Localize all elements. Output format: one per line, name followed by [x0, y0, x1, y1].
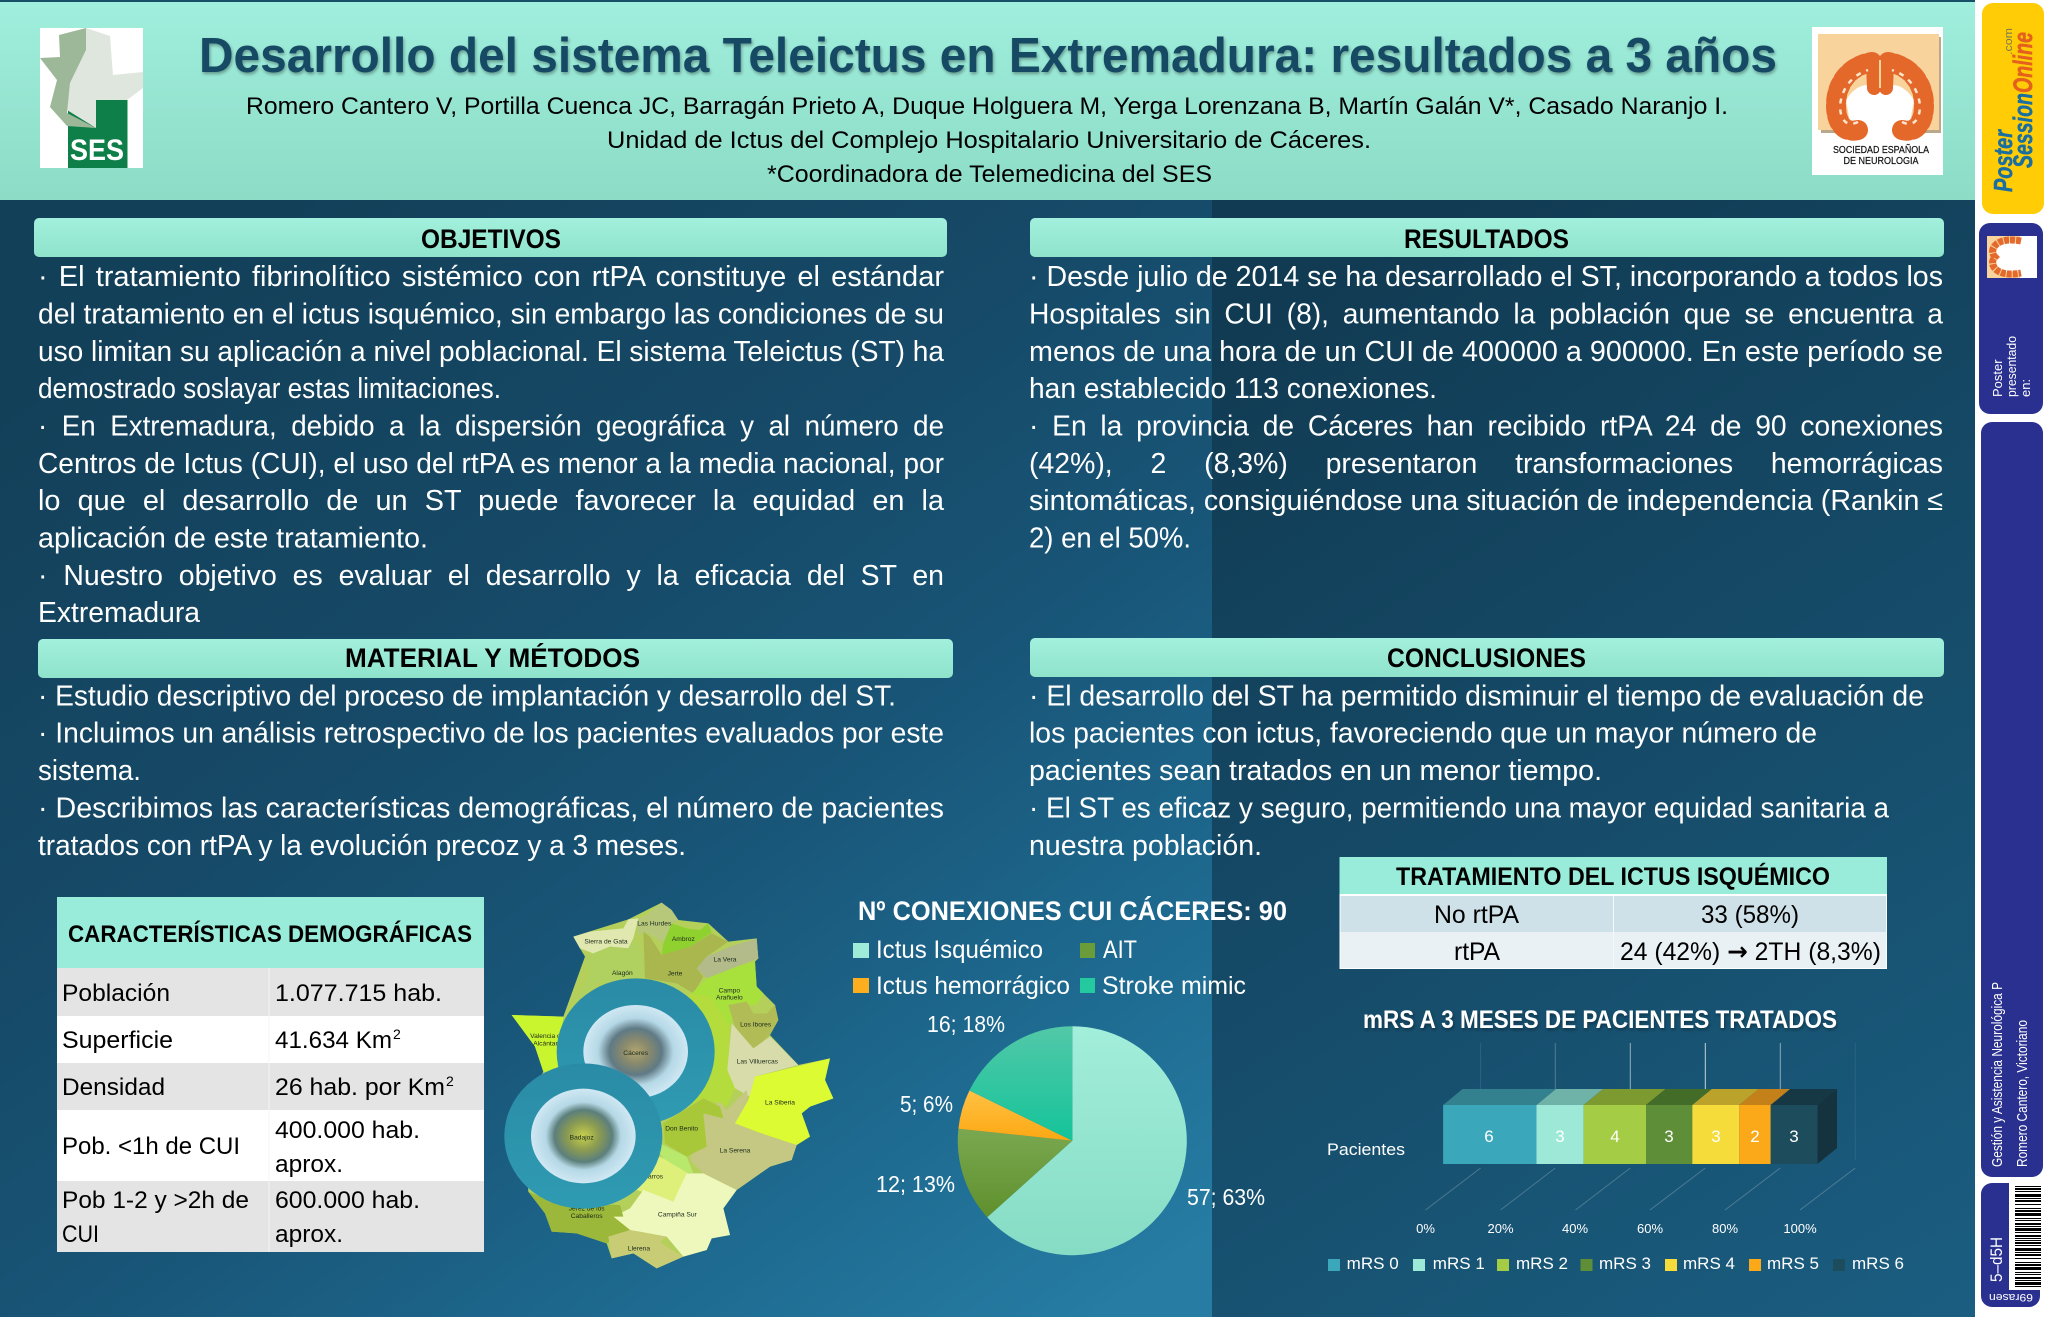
map of Extremadura: Los Ibores — [740, 1022, 772, 1029]
map of Extremadura: Jerez de los — [569, 1206, 605, 1213]
map of Extremadura: Campiña Sur — [658, 1212, 698, 1219]
sidebar: poster presentado en — [1979, 223, 2043, 414]
axis labels: 60% — [1637, 1221, 1663, 1236]
3D stacked bar: 3 — [1555, 1127, 1565, 1146]
chart: mRS a 3 meses — [1327, 1006, 1904, 1273]
map of Extremadura — [504, 903, 833, 1268]
table: características demográficas: aprox. — [275, 1221, 343, 1248]
map of Extremadura: Don Benito — [665, 1126, 698, 1133]
title: Desarrollo del sistema Teleictus en Extremadura: resultados a 3 años — [199, 29, 1777, 83]
text: objetivos: · En Extremadura, debido a la dispersión geográfica y al número de — [38, 410, 944, 442]
text: conclusiones: · El ST es eficaz y seguro, permitiendo una mayor equidad sanitaria a — [1029, 792, 1889, 824]
3D stacked bar: 3 — [1711, 1127, 1721, 1146]
pie chart — [958, 1026, 1187, 1255]
map of Extremadura: Ambroz — [672, 936, 695, 943]
chart title: Nº CONEXIONES CUI CÁCERES: 90 — [858, 895, 1287, 926]
logo: SES — [40, 28, 143, 168]
sidebar: session and author: Romero Cantero, Victoriano — [2014, 1020, 2031, 1167]
sidebar: poster presentado en: presentado — [2004, 336, 2019, 397]
pie labels: 57; 63% — [1187, 1184, 1265, 1210]
map of Extremadura: La Serena — [720, 1147, 751, 1154]
pie labels — [876, 1011, 1265, 1210]
3D stacked bar: 3 — [1664, 1127, 1674, 1146]
text: conclusiones — [1029, 680, 1924, 862]
text: objetivos: · Nuestro objetivo es evaluar el desarrollo y la eficacia del ST en — [38, 560, 944, 592]
bar legend: mRS 5 — [1767, 1254, 1819, 1273]
text: resultados: Hospitales sin CUI (8), aumentando la población que se encuentra a — [1029, 298, 1943, 330]
table: características demográficas: aprox. — [275, 1151, 343, 1178]
map of Extremadura: Valencia de — [530, 1033, 565, 1040]
text: material y metodos: · Estudio descriptivo del proceso de implantación y desarrollo del ST. — [38, 680, 896, 712]
sidebar: session and author: Gestión y Asistencia Neurológica P — [1989, 982, 2006, 1167]
heading: objetivos: OBJETIVOS — [421, 224, 561, 254]
bar legend: mRS 0 — [1347, 1254, 1399, 1273]
axis labels: Pacientes — [1327, 1140, 1405, 1159]
table: tratamiento del ictus isquémico: rtPA — [1454, 938, 1500, 966]
heading: conclusiones — [1030, 638, 1944, 677]
pie legend: Stroke mimic — [1102, 972, 1246, 1000]
text: objetivos: Centros de Ictus (CUI), el uso del rtPA es menor a la media nacional, por — [38, 448, 945, 480]
sidebar: barcode: 5–d5H — [1987, 1237, 2006, 1282]
logo: Sociedad Española de Neurología: SOCIEDAD ESPAÑOLA — [1833, 143, 1929, 156]
sidebar: session and author — [1981, 422, 2043, 1177]
text: objetivos: lo que el desarrollo de un ST puede favorecer la equidad en la — [38, 485, 944, 517]
sidebar: PosterSessionOnline logo: Session — [2008, 93, 2038, 168]
axis labels: 40% — [1562, 1221, 1588, 1236]
text: resultados — [1029, 261, 1943, 554]
heading: objetivos — [34, 218, 947, 257]
heading: conclusiones: CONCLUSIONES — [1387, 643, 1586, 673]
bar legend: mRS 4 — [1683, 1254, 1735, 1273]
map of Extremadura: Llerena — [628, 1246, 650, 1253]
authors and affiliation: *Coordinadora de Telemedicina del SES — [767, 161, 1212, 188]
table: características demográficas: Superficie — [62, 1027, 173, 1054]
table: características demográficas: 26 hab. por Km — [275, 1074, 445, 1101]
text: conclusiones: los pacientes con ictus, favoreciendo que un mayor número de — [1029, 718, 1817, 750]
text: resultados: 2) en el 50%. — [1029, 522, 1191, 554]
pie legend — [853, 936, 1246, 1000]
sidebar: poster presentado en: Poster — [1990, 359, 2005, 397]
3D stacked bar: 3 — [1789, 1127, 1799, 1146]
grid lines — [1426, 1043, 1855, 1210]
sidebar: PosterSessionOnline logo: Online — [2008, 32, 2038, 93]
text: objetivos — [38, 261, 945, 629]
table: características demográficas: CARACTERÍSTICAS DEMOGRÁFICAS — [68, 920, 472, 948]
table: características demográficas: 1.077.715 hab. — [275, 980, 442, 1007]
text: resultados: · En la provincia de Cáceres han recibido rtPA 24 de 90 conexiones — [1029, 410, 1943, 442]
circle: Cáceres — [557, 978, 715, 1125]
text: material y metodos — [38, 680, 944, 862]
map of Extremadura: Sierra de Gata — [584, 938, 628, 945]
table: características demográficas: 2 — [393, 1026, 401, 1042]
table: tratamiento del ictus isquémico: TRATAMIENTO DEL ICTUS ISQUÉMICO — [1396, 862, 1830, 891]
map of Extremadura: La Siberia — [765, 1099, 795, 1106]
pie labels: 16; 18% — [927, 1011, 1005, 1037]
sidebar: PosterSessionOnline logo: .com — [2003, 28, 2015, 55]
table: características demográficas: Población — [62, 980, 170, 1007]
text: resultados: han establecido 113 conexiones. — [1029, 373, 1437, 405]
logo: SES: SES — [70, 134, 124, 167]
logo: Sociedad Española de Neurología — [1812, 27, 1943, 175]
text: objetivos: demostrado soslayar estas limitaciones. — [38, 373, 501, 405]
text: objetivos: del tratamiento en el ictus isquémico, sin embargo las condiciones de su — [38, 298, 944, 330]
table: tratamiento del ictus isquémico: 24 (42%) → 2TH (8,3%) — [1620, 937, 1881, 966]
heading: resultados — [1030, 218, 1944, 257]
text: conclusiones: nuestra población. — [1029, 830, 1262, 862]
pie legend: Ictus hemorrágico — [876, 972, 1070, 1000]
table: características demográficas: 600.000 hab. — [275, 1187, 420, 1214]
pie labels: 5; 6% — [900, 1091, 953, 1117]
map of Extremadura: Campo — [719, 987, 740, 994]
3D stacked bar: 6 — [1484, 1127, 1494, 1146]
map of Extremadura: Jerte — [668, 971, 683, 978]
text: material y metodos: · Describimos las características demográficas, el número de pacientes — [38, 792, 944, 824]
authors and affiliation: Romero Cantero V, Portilla Cuenca JC, Barragán Prieto A, Duque Holguera M, Yerga Lorenzana B, Martín Galán V*, Casado Naranjo I. — [246, 93, 1728, 120]
text: objetivos: Extremadura — [38, 597, 200, 629]
3D stacked bar: 2 — [1750, 1127, 1760, 1146]
map of Extremadura: Barros — [644, 1173, 664, 1180]
bar legend: mRS 6 — [1852, 1254, 1904, 1273]
chart: conexiones CUI Cáceres — [853, 895, 1287, 1255]
circle: Cáceres: Cáceres — [623, 1050, 649, 1057]
circle: Badajoz: Badajoz — [570, 1135, 594, 1142]
text: resultados: · Desde julio de 2014 se ha desarrollado el ST, incorporando a todos los — [1029, 261, 1943, 293]
panel: objetivos — [34, 218, 947, 629]
sidebar: poster presentado en: en: — [2018, 379, 2033, 397]
circle: Badajoz — [504, 1063, 662, 1209]
axis labels — [1327, 1140, 1817, 1236]
heading: material y metodos — [38, 639, 953, 678]
map of Extremadura: Alcántara — [533, 1040, 562, 1047]
sidebar: barcode — [1981, 1183, 2042, 1307]
map of Extremadura: Arañuelo — [716, 994, 743, 1001]
bar legend: mRS 1 — [1433, 1254, 1485, 1273]
sidebar — [1975, 0, 2048, 1317]
table: tratamiento del ictus isquémico: 33 (58%) — [1701, 901, 1799, 929]
axis labels: 100% — [1783, 1221, 1817, 1236]
map of Extremadura: Las Hurdes — [637, 921, 672, 928]
heading: resultados: RESULTADOS — [1404, 224, 1569, 254]
text: objetivos: aplicación de este tratamiento. — [38, 522, 428, 554]
text: resultados: sintomáticas, consiguiéndose una situación de independencia (Rankin ≤ — [1029, 485, 1943, 517]
axis labels: 80% — [1712, 1221, 1738, 1236]
text: material y metodos: sistema. — [38, 755, 141, 787]
bar legend: mRS 3 — [1599, 1254, 1651, 1273]
text: objetivos: · El tratamiento fibrinolítico sistémico con rtPA constituye el estándar — [38, 261, 945, 293]
sidebar: barcode: 69rasen — [1989, 1291, 2033, 1303]
map of Extremadura: Alagón — [612, 970, 633, 977]
bar legend — [1328, 1254, 1904, 1273]
sidebar: PosterSessionOnline logo: Poster — [1988, 129, 2018, 192]
pie legend: AIT — [1103, 936, 1137, 964]
map of Extremadura: Caballeros — [571, 1213, 603, 1220]
text: conclusiones: pacientes sean tratados en un menor tiempo. — [1029, 755, 1602, 787]
header band — [0, 0, 1975, 200]
table: tratamiento del ictus isquémico: No rtPA — [1434, 901, 1519, 929]
pie legend: Ictus Isquémico — [876, 936, 1043, 964]
map of Extremadura: La Vera — [714, 957, 737, 964]
3D stacked bar — [1443, 1089, 1837, 1164]
map of Extremadura: Las Villuercas — [737, 1058, 779, 1065]
table: características demográficas: Pob 1-2 y >2h de — [62, 1187, 249, 1214]
heading: material y metodos: MATERIAL Y MÉTODOS — [345, 642, 640, 673]
3D stacked bar: 4 — [1610, 1127, 1620, 1146]
pie labels: 12; 13% — [876, 1171, 955, 1197]
text: material y metodos: · Incluimos un análisis retrospectivo de los pacientes evaluados por este — [38, 718, 944, 750]
table: características demográficas: 400.000 hab. — [275, 1117, 420, 1144]
text: material y metodos: tratados con rtPA y la evolución precoz y a 3 meses. — [38, 830, 686, 862]
sidebar: PosterSessionOnline logo — [1982, 3, 2044, 214]
panel: resultados — [1029, 218, 1944, 554]
axis labels: 20% — [1487, 1221, 1514, 1236]
table: tratamiento del ictus isquémico — [1340, 857, 1887, 969]
panel: conclusiones — [1029, 638, 1944, 862]
authors and affiliation — [246, 93, 1728, 188]
axis labels: 0% — [1416, 1221, 1435, 1236]
table: características demográficas: Pob. <1h de CUI — [62, 1133, 240, 1160]
text: resultados: (42%), 2 (8,3%) presentaron transformaciones hemorrágicas — [1029, 448, 1943, 480]
table: características demográficas: 41.634 Km — [275, 1027, 392, 1054]
bar legend: mRS 2 — [1516, 1254, 1568, 1273]
text: resultados: menos de una hora de un CUI de 400000 a 900000. En este período se — [1029, 336, 1943, 368]
authors and affiliation: Unidad de Ictus del Complejo Hospitalario Universitario de Cáceres. — [607, 127, 1371, 154]
text: conclusiones: · El desarrollo del ST ha permitido disminuir el tiempo de evaluación de — [1029, 680, 1924, 712]
chart title: mRS A 3 MESES DE PACIENTES TRATADOS — [1363, 1006, 1837, 1034]
table: características demográficas: Densidad — [62, 1074, 165, 1101]
panel: material y metodos — [38, 639, 953, 862]
logo: Sociedad Española de Neurología: DE NEUROLOGIA — [1844, 156, 1919, 167]
text: objetivos: uso limitan su aplicación a nivel poblacional. El sistema Teleictus (ST) ha — [38, 336, 944, 368]
table: características demográficas: 2 — [446, 1073, 454, 1089]
table: características demográficas — [57, 897, 484, 1252]
table: características demográficas: CUI — [62, 1221, 99, 1248]
